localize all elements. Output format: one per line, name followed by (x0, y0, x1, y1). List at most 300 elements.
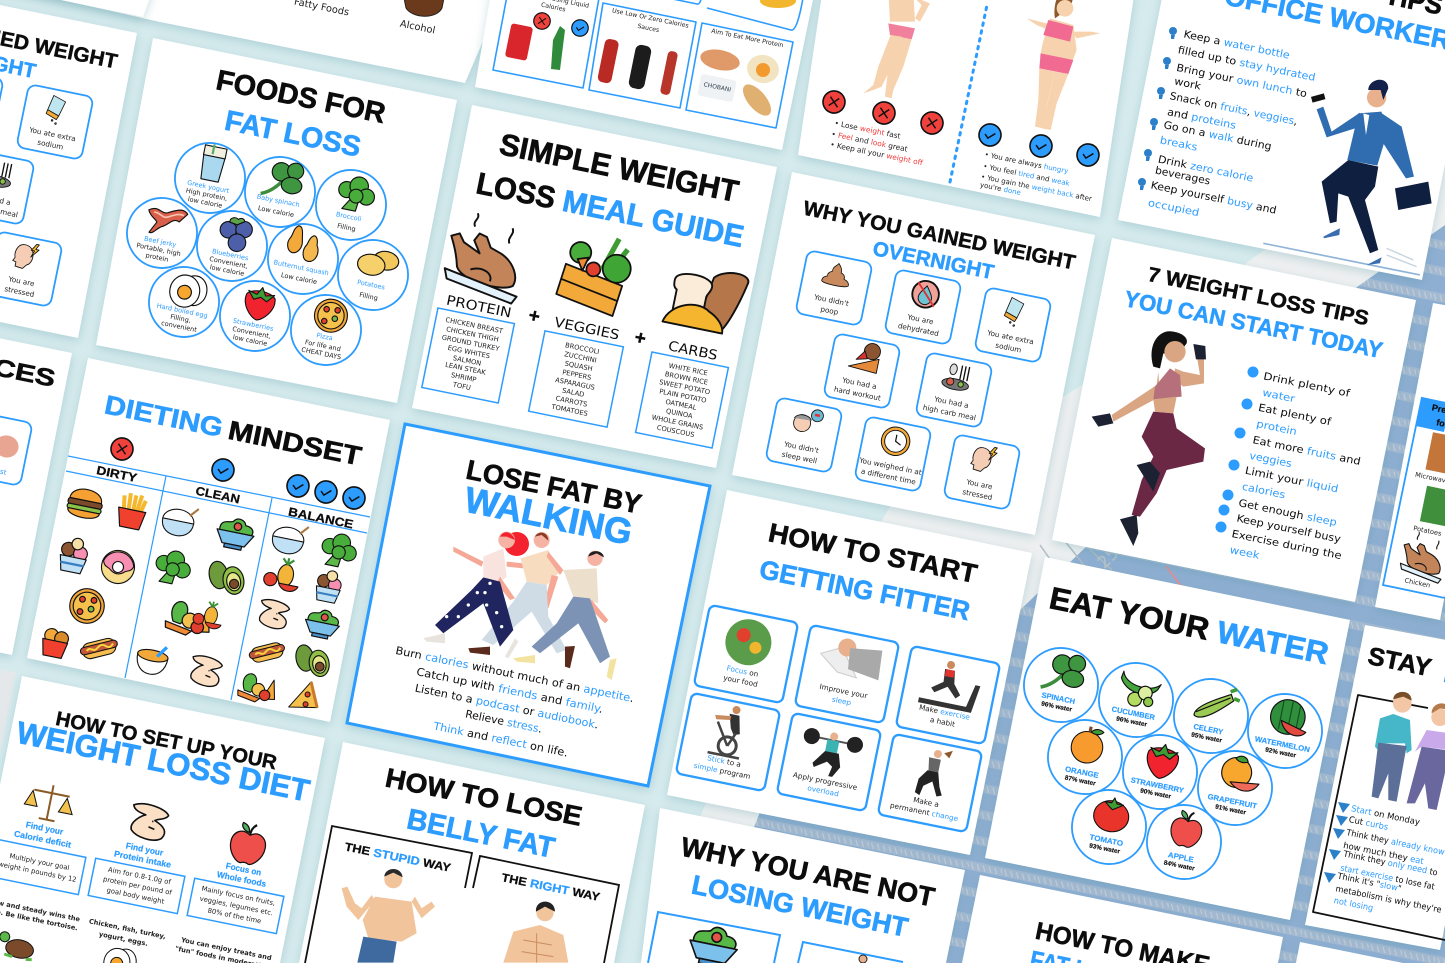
tip list (1229, 370, 1362, 562)
list: how much they eat (1342, 841, 1425, 867)
illustration: heavier woman (1027, 0, 1100, 130)
list (1333, 804, 1445, 916)
panel: 7 weight loss tips (1052, 238, 1416, 602)
column: whole foods: Focus on (225, 861, 262, 878)
tip list: breaks (1159, 134, 1198, 154)
column: calorie deficit (0, 780, 86, 961)
column: calorie deficit: Calorie deficit (13, 828, 72, 850)
box: hard workout: hard workout (833, 384, 882, 403)
list: bad results (979, 151, 1093, 203)
box: improve sleep: sleep (831, 695, 852, 707)
box: permanent change: permanent change (889, 801, 959, 823)
box: salad (648, 912, 780, 963)
heading: why you gained weight: WHY YOU GAINED WEIGHT (801, 197, 1078, 275)
box: high carb meal: You had a (933, 394, 970, 410)
list: carbs: PLAIN POTATO (659, 387, 707, 405)
box: dehydrated: You are (906, 312, 935, 326)
icons: three checks (285, 473, 367, 511)
icons: balance foods (236, 520, 360, 713)
heading: foods for: FOODS FOR (213, 64, 388, 130)
illustration: office worker man (1263, 80, 1432, 275)
frame: stupid way: THE STUPID WAY (343, 841, 452, 875)
panel: how to lose belly fat (299, 742, 645, 963)
list: Start on Monday (1350, 804, 1421, 828)
label: protein: PROTEIN (445, 293, 513, 321)
box: improve sleep (795, 625, 899, 723)
item: hard boiled egg (143, 261, 225, 343)
icon: crate of vegetables (554, 229, 636, 318)
item: watermelon: 92% water (1264, 747, 1297, 760)
box: sodium: sodium (37, 138, 64, 152)
item: strawberries: low calorie (232, 333, 268, 348)
tip list: protein (1255, 418, 1298, 438)
box: poop (795, 250, 873, 326)
box: sleep: sleep well (781, 450, 818, 466)
item: beef jerky (121, 192, 203, 274)
panel: bottom right partial card (1296, 942, 1403, 963)
box: low calorie sauces (589, 3, 696, 108)
illustration: couple (1372, 692, 1445, 810)
heading: weight loss diet: WEIGHT LOSS DIET (14, 715, 313, 809)
box: stressed: You are (965, 477, 994, 491)
item: broccoli (310, 164, 392, 246)
list: protein (422, 308, 514, 403)
icon: red x (109, 436, 135, 462)
heading: 7 weight loss tips: 7 WEIGHT LOSS TIPS (1146, 263, 1371, 330)
column: whole foods: Whole foods (216, 869, 267, 889)
heading: walking: WALKING (461, 479, 636, 553)
list: carbs: QUINOA (665, 407, 694, 420)
item: greek yogurt: low calorie (187, 195, 223, 210)
box: dehydrated (0, 66, 4, 142)
tip list: Keep yourself busy and (1150, 179, 1278, 217)
box: progressive overload: Apply progressive (792, 770, 858, 792)
box: sodium (16, 84, 94, 160)
list: veggies: CARROTS (555, 394, 588, 409)
column: protein intake: Protein intake (113, 848, 172, 870)
column: whole foods: Mainly focus on fruits, (201, 885, 276, 907)
box: improve sleep: Improve your (819, 682, 868, 700)
divider: dotted line (950, 5, 987, 182)
box: low calorie sauces: Sauces (637, 23, 660, 34)
panel: office worker tips (1118, 0, 1445, 280)
panel: lose fat by walking (347, 424, 710, 786)
tip list: Eat more fruits and (1252, 434, 1362, 468)
box: progressive overload: overload (807, 783, 840, 798)
list: veggies: TOMATOES (550, 403, 589, 418)
box: poop: poop (820, 304, 840, 317)
tip list: Go on a walk during (1163, 119, 1273, 153)
box: high carb meal (915, 352, 993, 428)
item: potatoes (332, 234, 414, 316)
item: celery (1167, 672, 1255, 760)
heading: why you are not: WHY YOU ARE NOT (678, 832, 938, 913)
list: veggies: ZUCCHINI (564, 350, 597, 365)
list: protein: CHICKEN BREAST (445, 316, 505, 336)
item: potatoes: Filling (359, 291, 379, 302)
item: spinach: 96% water (1040, 701, 1073, 714)
box: different time: You weighed in at (858, 455, 923, 477)
item: watermelon: WATERMELON (1254, 734, 1311, 754)
box: row above right (707, 0, 803, 30)
list: protein: SALMON (452, 354, 482, 368)
list: protein: GROUND TURKEY (441, 334, 501, 353)
box: low calorie liquids: Calories (540, 2, 566, 13)
item: baby spinach: Low calorie (257, 204, 295, 219)
box: focus on food (694, 605, 798, 703)
item: beef jerky: protein (145, 251, 169, 264)
list: good results: • Lose weight fast (834, 118, 901, 141)
column: whole foods: veggies, legumes etc. (199, 895, 274, 917)
list: not losing (1333, 896, 1374, 914)
plus sign: + (633, 327, 648, 350)
heading: how to set up your: HOW TO SET UP YOUR (54, 708, 279, 774)
list: bad results: • You are always hungry (984, 151, 1069, 175)
panel: why you gained weight overnight (732, 172, 1095, 535)
tip list: Exercise during the (1231, 528, 1343, 562)
panel: body comparison (798, 0, 1135, 217)
heading: fat loss: FAT LOSS (222, 105, 364, 164)
item: butternut squash (262, 218, 344, 300)
column: calorie deficit: Multiply your goal (9, 852, 70, 872)
tip list: Limit your liquid (1244, 465, 1339, 495)
tip list: occupied (1147, 197, 1200, 219)
tip list: veggies (1248, 450, 1293, 470)
item: tomato: 93% water (1088, 843, 1121, 856)
box: carb meal (0, 149, 35, 225)
box: stick to a simple program: simple program (693, 761, 751, 781)
box: low calorie liquids (493, 0, 599, 88)
item: broccoli: Broccoli (335, 210, 362, 223)
item: grapefruit: GRAPEFRUIT (1207, 792, 1258, 811)
list: carbs: COUSCOUS (656, 424, 695, 439)
heading: overnight: OVERNIGHT (871, 237, 996, 284)
tip list: Eat plenty of (1257, 402, 1332, 428)
box: more protein: Aim To Eat More Protein (711, 28, 784, 49)
column: protein intake: Chicken, fish, turkey, (88, 917, 167, 941)
list: Think it's "slow" (1336, 871, 1402, 894)
box: sleep (765, 397, 843, 473)
item: pizza (285, 289, 367, 371)
box: permanent change (878, 734, 982, 832)
heading: dieting: DIETING (102, 390, 226, 443)
label: alcohol: Alcohol (399, 19, 436, 37)
list: protein: LEAN STEAK (444, 361, 487, 377)
box: stick to a simple program: Stick to a (706, 753, 742, 769)
item: orange: ORANGE (1064, 764, 1099, 780)
list: veggies: SQUASH (564, 360, 593, 373)
frame (1313, 695, 1445, 940)
list: carbs: SWEET POTATO (658, 378, 711, 396)
ratings: red crosses (821, 89, 945, 136)
item: blueberries (191, 205, 273, 287)
item: potatoes packet: Potatoes (1413, 524, 1443, 538)
box: more protein (686, 23, 793, 128)
item: strawberry: STRAWBERRY (1130, 775, 1185, 795)
illustration: slim woman (863, 0, 930, 98)
box: high carb meal: high carb meal (922, 403, 977, 422)
list: veggies: ASPARAGUS (555, 376, 595, 392)
item: tomato (1065, 783, 1153, 871)
heading: you can start today: YOU CAN START TODAY (1122, 286, 1385, 363)
column: protein intake (88, 802, 185, 963)
list: veggies: BROCCOLI (564, 341, 600, 356)
heading: how to lose: HOW TO LOSE (383, 763, 585, 832)
box: stressed (943, 434, 1021, 510)
item: blueberries: Convenient, (209, 255, 249, 270)
tip list: Keep a water bottle (1182, 28, 1291, 62)
box: different time (854, 416, 932, 492)
item: greek yogurt: High protein, (185, 187, 228, 203)
illustration: three people walking (423, 532, 617, 680)
box: different time: a different time (860, 467, 917, 487)
item: cucumber (1092, 656, 1180, 744)
panel: top sauces and protein card (475, 0, 815, 150)
bullets (1216, 366, 1258, 532)
tip list: Drink zero calorie (1157, 154, 1254, 185)
icon: bread (662, 261, 750, 337)
box: poop: You didn't (812, 292, 850, 308)
box: stressed: You are (7, 274, 36, 288)
box: sodium: You ate extra (985, 328, 1035, 346)
item: apple (1140, 798, 1228, 886)
column: protein intake: goal body weight (106, 886, 165, 906)
tip list: water (1261, 387, 1297, 405)
body text: Burn calories without much of an appetite. (394, 644, 635, 705)
heading: getting fitter: GETTING FITTER (757, 554, 973, 626)
item: blueberries: Blueberries (211, 247, 250, 263)
item: butternut squash: Butternut squash (273, 258, 330, 277)
header: pre made (1416, 397, 1445, 432)
heading: simple weight: SIMPLE WEIGHT (497, 127, 742, 209)
icon: roast chicken (440, 209, 531, 304)
heading: mindset: MINDSET (226, 415, 364, 471)
body text: Listen to a podcast or audiobook. (414, 682, 600, 732)
bullets: light bulbs (1138, 27, 1177, 190)
list: carbs: WHOLE GRAINS (651, 413, 704, 432)
box: more protein: CHOBANI (703, 81, 732, 94)
list: good results: • Keep all your weight off (829, 140, 924, 168)
panel: fatty foods card (0, 0, 520, 83)
column: protein intake: Find your (125, 840, 165, 858)
panel: top left partial card (0, 0, 160, 17)
tip list: and proteins (1166, 106, 1237, 132)
list: protein: EGG WHITES (447, 344, 491, 360)
panel: how to make fat loss (962, 875, 1283, 963)
tip list: week (1229, 544, 1261, 562)
item: roast chicken (1398, 530, 1445, 590)
item: strawberries: Strawberries (232, 317, 275, 333)
item: pizza: CHEAT DAYS (301, 346, 342, 361)
item: potatoes: Potatoes (356, 278, 386, 292)
ratings: blue checks (977, 122, 1101, 168)
panel: pre-made foods partial card (1375, 303, 1445, 620)
icon: blue check (210, 457, 236, 483)
item: apple: APPLE (1167, 850, 1195, 864)
item: greek yogurt: Greek yogurt (186, 179, 230, 195)
box: dehydrated: dehydrated (897, 321, 940, 338)
box: low calorie sauces: Use Low Or Zero Calories (611, 7, 689, 30)
item: hard boiled egg: Filling, (170, 313, 192, 325)
item: celery: CELERY (1193, 722, 1224, 737)
item: baby spinach: Baby spinach (256, 193, 300, 209)
panel: how to set up weight loss diet (0, 676, 325, 963)
label: veggies: VEGGIES (553, 315, 621, 343)
heading: loss meal guide: LOSS MEAL GUIDE (473, 166, 747, 254)
box: sleep: You didn't (782, 439, 820, 455)
box: make exercise a habit: a habit (929, 715, 956, 729)
box: sodium: You ate extra (27, 125, 77, 143)
item: butternut squash: Low calorie (280, 271, 318, 286)
label: balance: BALANCE (287, 505, 355, 532)
list: bad results: • You feel tired and weak (982, 162, 1071, 188)
column: protein intake: Aim for 0.8-1.0g of (107, 866, 172, 886)
item: greek yogurt (169, 137, 251, 219)
item: baby spinach (239, 151, 321, 233)
frame: right way: THE RIGHT WAY (500, 872, 601, 904)
heading: losing weight: LOSING WEIGHT (689, 870, 911, 943)
panel: why you gained weight duplicate left (0, 0, 137, 338)
item: rice packet (1414, 432, 1445, 485)
box: second reason (798, 942, 903, 963)
item: strawberries (214, 275, 296, 357)
box: sodium: sodium (995, 341, 1022, 355)
list: Cut curbs (1348, 815, 1389, 833)
item: celery: 95% water (1190, 732, 1223, 745)
box: focus on food: Focus on (726, 664, 759, 679)
illustration: jumping woman (1092, 331, 1206, 546)
item: beef jerky: Beef jerky (143, 235, 177, 249)
heading: lose fat by: LOSE FAT BY (464, 454, 644, 520)
panel: how to start getting fitter (667, 490, 1032, 855)
panel: stay on track (1305, 625, 1445, 950)
box: stressed (0, 231, 63, 307)
body text (394, 644, 635, 760)
heading: stay: STAY (1365, 642, 1434, 682)
tip list: Get enough sleep (1237, 497, 1338, 529)
item: pizza: Pizza (316, 331, 333, 342)
column: calorie deficit: Find your (25, 819, 65, 837)
item: apple: 84% water (1163, 859, 1196, 873)
box: meat (0, 410, 33, 486)
column: whole foods: You can enjoy treats and (179, 936, 273, 962)
item: cucumber: 96% water (1115, 716, 1148, 729)
icon: alcohol glass (404, 0, 444, 16)
icon: yellow food (760, 0, 796, 8)
box: progressive overload (777, 713, 881, 811)
tip list: Drink plenty of (1262, 370, 1351, 400)
panel: protein sources partial card (0, 291, 72, 655)
list: good results: • Feel and look great (831, 129, 909, 154)
item: blueberries: low calorie (209, 263, 245, 278)
list: veggies: PEPPERS (562, 368, 592, 382)
heading: eat your water: EAT YOUR WATER (1046, 580, 1332, 671)
tip list: work (1173, 75, 1202, 93)
heading: how to start: HOW TO START (766, 517, 980, 589)
frame: right way (473, 856, 619, 963)
bullets: triangles (1324, 802, 1350, 883)
list: metabolism is why they're (1334, 884, 1442, 916)
body text: Think and reflect on life. (431, 719, 569, 760)
heading: belly fat: BELLY FAT (404, 804, 558, 865)
list: protein: CHICKEN THIGH (445, 325, 499, 344)
list: carbs: WHITE RICE (668, 362, 708, 377)
item: orange (1041, 713, 1129, 801)
item: strawberries: Convenient, (232, 325, 272, 340)
list: start exercise to lose fat (1339, 864, 1436, 893)
box: focus on food: your food (723, 673, 758, 689)
item: orange: 87% water (1064, 774, 1097, 788)
panel: bottom left grey card (0, 668, 16, 963)
box: permanent change: Make a (912, 795, 940, 809)
tip list (1147, 28, 1316, 219)
list: protein: SHRIMP (450, 371, 477, 384)
box: dehydrated (884, 269, 962, 345)
item: broccoli: Filling (336, 222, 356, 233)
box: stressed: stressed (962, 487, 993, 502)
tip list: beverages (1154, 165, 1211, 188)
table lines (66, 456, 370, 700)
box: stressed: stressed (4, 284, 35, 299)
box: hard workout: You had a (841, 375, 878, 391)
item: roast chicken: Chicken (1404, 577, 1431, 590)
panel: foods for fat loss (96, 38, 457, 403)
list: carbs: BROWN RICE (664, 370, 709, 387)
column: whole foods: 80% of the time (207, 907, 262, 925)
item: hard boiled egg: Hard boiled egg (156, 302, 208, 320)
list: carbs (636, 352, 728, 448)
panel: dieting mindset (27, 358, 390, 722)
list: carbs: OATMEAL (665, 398, 698, 412)
body text: Catch up with friends and family. (415, 665, 604, 716)
item: tomato: TOMATO (1089, 832, 1124, 848)
item: watermelon (1241, 687, 1329, 775)
box: make exercise a habit (896, 646, 1000, 744)
box: row above left (610, 0, 702, 4)
list: bad results: you're done (979, 181, 1022, 197)
box: sodium (974, 287, 1052, 363)
label: carbs: CARBS (667, 338, 719, 364)
label: dirty: DIRTY (95, 463, 138, 485)
tip list: filled up to stay hydrated (1177, 44, 1316, 84)
item: strawberry (1116, 728, 1204, 816)
item: grapefruit (1191, 744, 1279, 832)
icons: clean foods (134, 502, 257, 688)
list: Think they only need to (1341, 849, 1438, 879)
body text: Relieve stress. (464, 707, 543, 736)
list: veggies (529, 331, 623, 427)
tip list: calories (1241, 481, 1286, 501)
list: bad results: • You gain the weight back after (980, 173, 1093, 203)
list: veggies: SALAD (561, 387, 585, 399)
tip list: Keep yourself busy (1235, 513, 1342, 546)
column: protein intake: yogurt, eggs. (98, 930, 149, 948)
column: whole foods (174, 821, 284, 963)
list: protein: TOFU (451, 380, 472, 392)
column: protein intake: protein per pound of (102, 875, 173, 897)
label: clean: CLEAN (194, 484, 241, 506)
item: strawberry: 90% water (1139, 788, 1172, 801)
item: potatoes packet (1413, 486, 1445, 538)
panel: why you are not losing weight (641, 808, 965, 963)
tip list: Bring your own lunch to (1175, 62, 1308, 100)
panel: simple weight loss meal guide (412, 105, 777, 468)
box: make exercise a habit: Make exercise (918, 703, 971, 722)
tip list: Snack on fruits, veggies, (1169, 90, 1298, 128)
item: hard boiled egg: convenient (161, 319, 198, 334)
box: hard workout (823, 333, 901, 409)
item: pizza: For life and (304, 338, 341, 353)
